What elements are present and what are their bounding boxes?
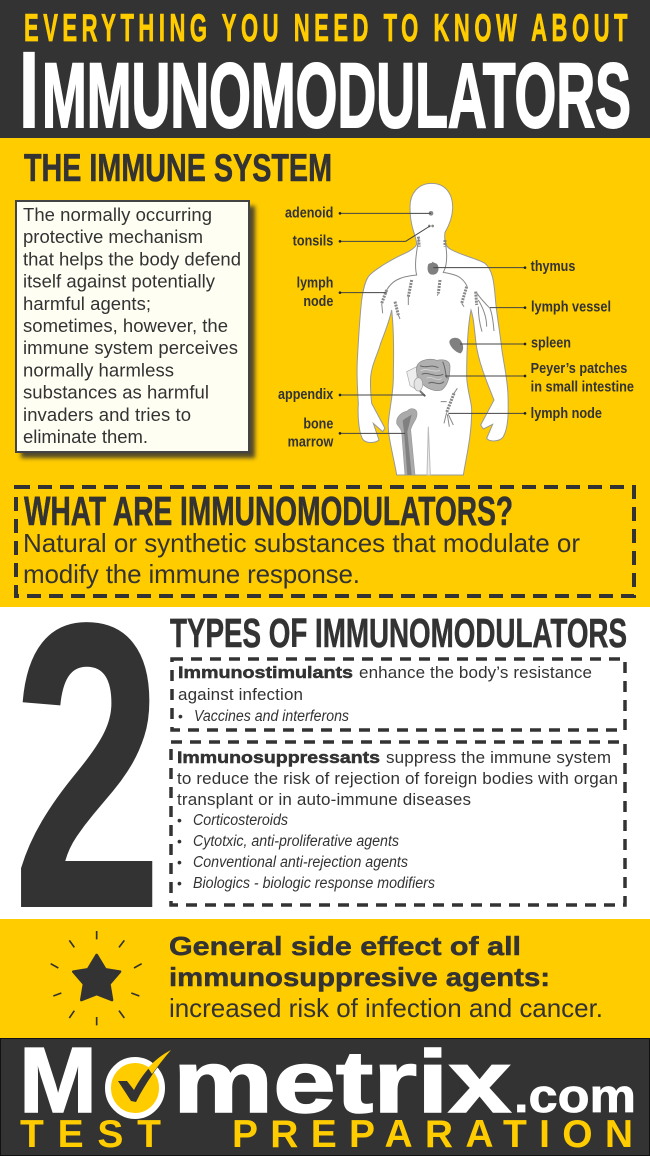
- side effect text: General side effect of all: [169, 931, 521, 961]
- title: immunomodulators: I: [18, 29, 40, 152]
- box: immunosuppressants: suppress the immune system: [386, 748, 611, 767]
- diagram labels: Peyer’s patches: [531, 361, 627, 377]
- panel: side effect: [0, 919, 650, 1038]
- box: immunosuppressants: Immunosuppressants: [177, 748, 380, 767]
- diagram labels: lymph vessel: [531, 300, 611, 316]
- box: immunosuppressants: •: [177, 833, 182, 849]
- definition text: Natural or synthetic substances that modulate or: [23, 528, 580, 558]
- box: immunosuppressants: Conventional anti-rejection agents: [193, 854, 408, 871]
- chart: human body diagram: [278, 183, 634, 475]
- diagram labels: bone: [303, 416, 333, 432]
- text box: definition: harmful agents;: [23, 293, 151, 314]
- organ: thymus: [428, 262, 439, 275]
- logo: mometrix.com: M: [19, 1028, 97, 1132]
- body silhouette: [357, 183, 508, 475]
- box: immunosuppressants: [171, 742, 625, 905]
- panel: header: [0, 0, 650, 152]
- icon: check mark in circle: [108, 1050, 171, 1116]
- side effect text: increased risk of infection and cancer.: [169, 993, 603, 1023]
- diagram labels: thymus: [531, 259, 575, 275]
- logo: mometrix.com: .com: [514, 1069, 636, 1122]
- diagram labels: lymph: [297, 276, 333, 292]
- side effect text: immunosuppresive agents:: [169, 962, 550, 992]
- diagram labels: [278, 206, 634, 451]
- logo: mometrix.com: metrix: [173, 1032, 511, 1131]
- box: immunostimulants: [172, 659, 625, 730]
- lymph vessels and nodes: [382, 237, 494, 427]
- leader lines: [340, 213, 525, 433]
- box: immunosuppressants: Biologics - biologic response modifiers: [193, 875, 435, 892]
- box: immunosuppressants: to reduce the risk of rejection of foreign bodies with organ: [177, 769, 618, 788]
- text box: definition: normally harmless: [23, 359, 174, 380]
- definition text: modify the immune response.: [23, 559, 360, 589]
- heading: the immune system: THE IMMUNE SYSTEM: [24, 147, 332, 190]
- panel: the immune system: [0, 138, 650, 607]
- text box: definition: substances as harmful: [23, 382, 209, 403]
- tagline: test preparation: [20, 1113, 633, 1156]
- diagram labels: lymph node: [531, 406, 602, 422]
- diagram labels: spleen: [531, 335, 571, 351]
- organ: spleen: [449, 338, 463, 353]
- panel: footer logo: [0, 1028, 650, 1156]
- diagram labels: appendix: [278, 387, 333, 403]
- text box: definition: eliminate them.: [23, 426, 148, 447]
- box: immunosuppressants: •: [177, 854, 182, 870]
- panel: types: [0, 538, 650, 994]
- box: immunosuppressants: Corticosteroids: [193, 812, 288, 829]
- diagram labels: marrow: [288, 435, 334, 451]
- box: immunostimulants: Vaccines and interferons: [194, 708, 349, 725]
- text box: definition: immune system perceives: [23, 337, 238, 358]
- diagram labels: adenoid: [285, 206, 333, 222]
- text box: definition: [16, 201, 255, 458]
- box: immunostimulants: •: [178, 708, 183, 724]
- text box: definition: that helps the body defend: [23, 248, 241, 269]
- box: immunosuppressants: transplant or in auto-immune diseases: [177, 790, 471, 809]
- big number 2: 2: [12, 538, 163, 994]
- diagram labels: in small intestine: [531, 380, 634, 396]
- box: immunosuppressants: Cytotxic, anti-proliferative agents: [193, 833, 399, 850]
- box: immunostimulants: Immunostimulants: [178, 663, 353, 682]
- text box: definition: protective mechanism: [23, 226, 203, 247]
- diagram labels: tonsils: [293, 234, 333, 250]
- organ: intestines: [407, 359, 450, 396]
- tagline: test preparation: PREPARATION: [232, 1113, 633, 1156]
- callout: what are immunomodulators: [16, 487, 634, 596]
- icon: star with rays: [51, 931, 142, 1025]
- box: immunosuppressants: •: [177, 812, 182, 828]
- text box: definition: invaders and tries to: [23, 404, 191, 425]
- definition text: [23, 528, 580, 589]
- leader dots: [339, 212, 526, 435]
- text box: definition: itself against potentially: [23, 271, 216, 292]
- organ: adenoid and tonsils: [428, 211, 434, 227]
- box: immunostimulants: enhance the body’s resistance: [359, 663, 592, 682]
- text box: definition: The normally occurring: [23, 204, 212, 225]
- organ: femur with marrow: [397, 409, 417, 475]
- logo: mometrix.com: [19, 1028, 636, 1132]
- box: immunosuppressants: •: [177, 875, 182, 891]
- diagram labels: node: [303, 294, 333, 310]
- box: immunostimulants: against infection: [178, 685, 303, 704]
- tagline: test preparation: TEST: [20, 1113, 161, 1156]
- text box: definition: sometimes, however, the: [23, 315, 228, 336]
- side effect text: [169, 931, 603, 1023]
